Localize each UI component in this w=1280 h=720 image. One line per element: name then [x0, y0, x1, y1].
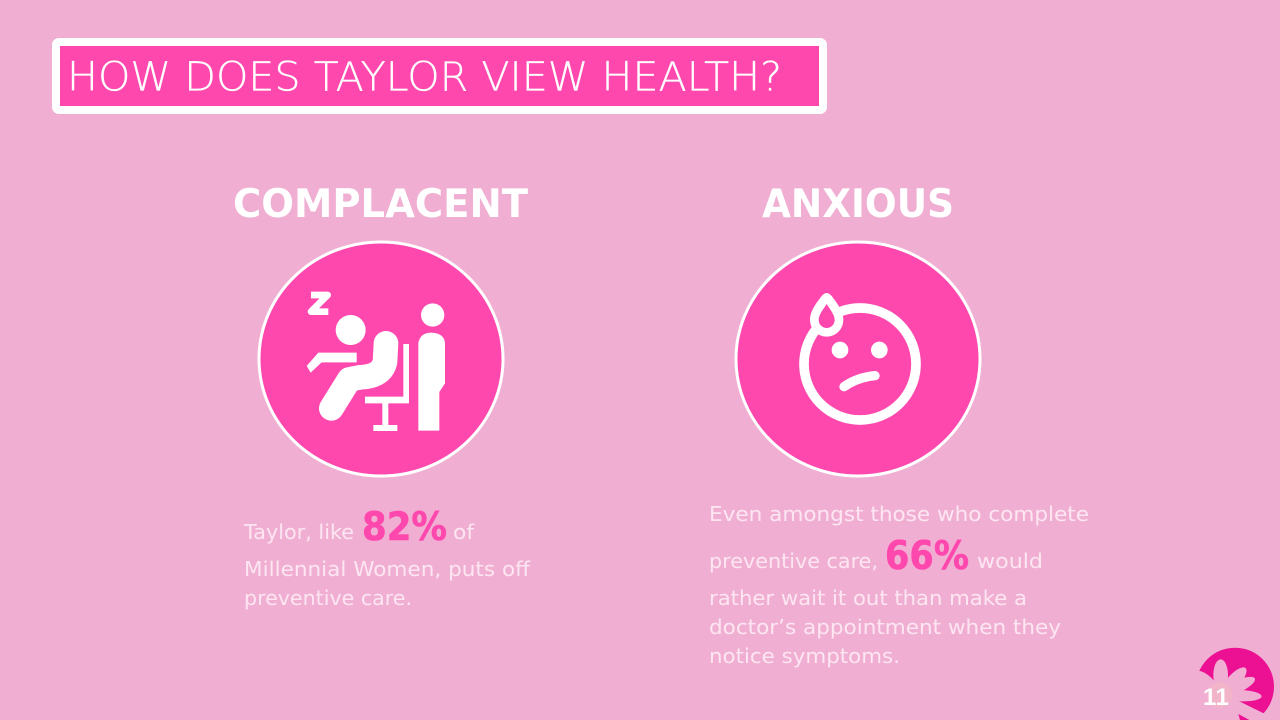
text block: anxious: Even amongst those who complete: [709, 502, 1089, 526]
text block: anxious: rather wait it out than make a: [709, 586, 1027, 610]
icon: worried face circle: [736, 242, 980, 476]
text block: anxious: preventive care,: [709, 549, 878, 573]
heading: anxious: ANXIOUS: [762, 182, 954, 227]
text block: complacent: Taylor, like: [243, 520, 354, 544]
stat: 66%: 66%: [885, 534, 969, 579]
heading: complacent: COMPLACENT: [233, 182, 528, 227]
text block: complacent: preventive care.: [244, 586, 412, 610]
text block: complacent: Millennial Women, puts off: [244, 557, 531, 581]
text block: anxious: would: [977, 549, 1043, 573]
text block: complacent: of: [453, 520, 475, 544]
text block: complacent: [243, 505, 531, 610]
title text: HOW DOES TAYLOR VIEW HEALTH?: [67, 54, 782, 100]
title box: [56, 42, 823, 110]
stat: 82%: 82%: [362, 505, 447, 550]
page number: 11: [1203, 684, 1229, 711]
text block: anxious: notice symptoms.: [709, 644, 900, 668]
page badge: flower: [1190, 648, 1280, 720]
text block: anxious: [709, 502, 1089, 668]
text block: anxious: doctor’s appointment when they: [709, 615, 1061, 639]
icon: sleeping person circle: [259, 242, 503, 476]
